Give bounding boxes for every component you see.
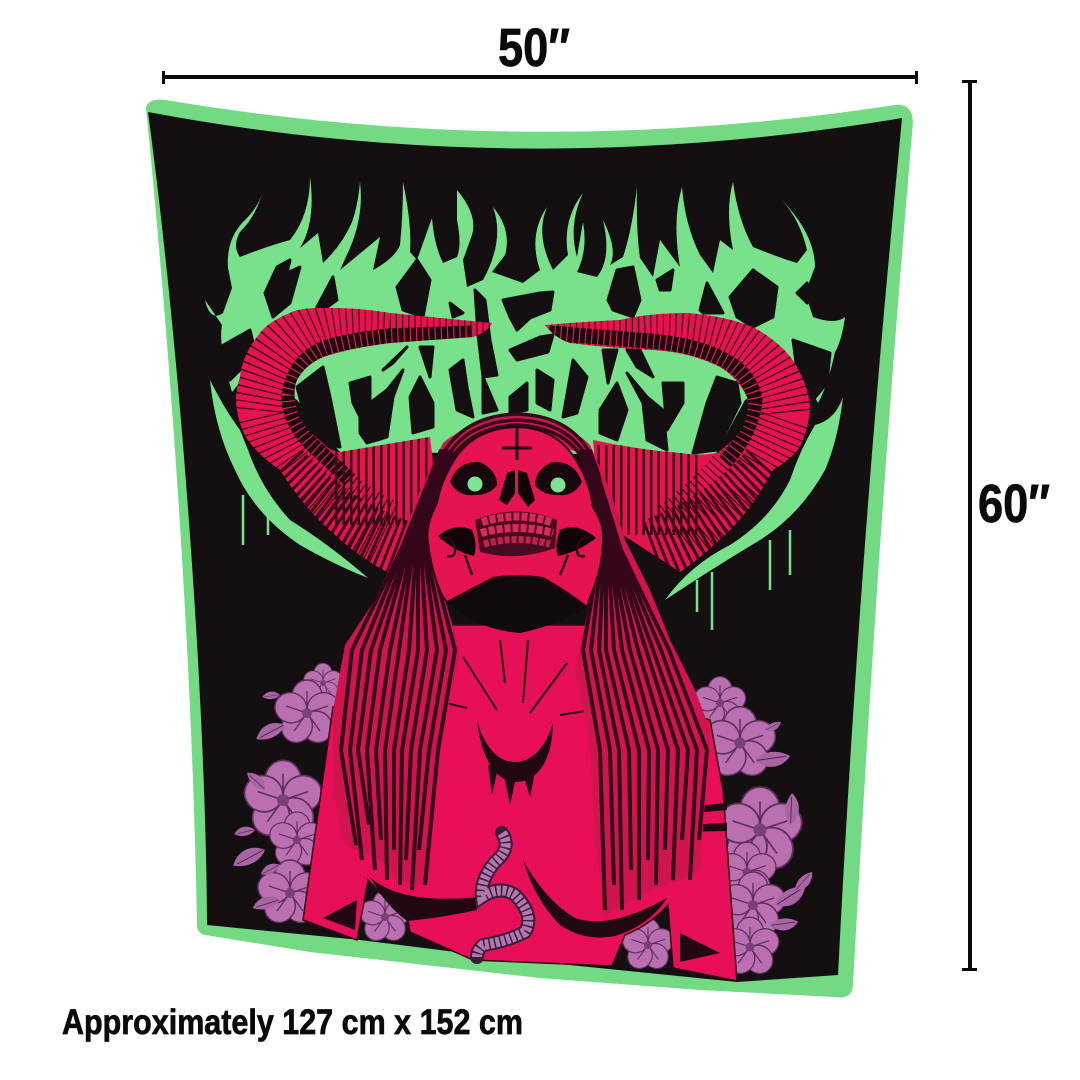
artwork: right breast curve bbox=[523, 860, 667, 938]
caption: metric size: Approximately 127 cm x 152 cm bbox=[62, 1003, 523, 1042]
artwork: flowers bbox=[231, 663, 817, 979]
artwork: hair arcs over skull bbox=[432, 414, 600, 480]
dimension: width arrow bbox=[162, 71, 918, 84]
blanket bbox=[146, 100, 913, 997]
artwork: black mouth bbox=[443, 576, 592, 633]
dimension: height arrow bbox=[962, 80, 977, 971]
blanket black field bbox=[148, 112, 902, 982]
skull: teeth bbox=[475, 512, 557, 556]
artwork: crescent moon necklace bbox=[477, 720, 553, 805]
skull: cheek hollows bbox=[438, 527, 596, 556]
skull: eyes bbox=[450, 462, 582, 495]
artwork: skull bbox=[427, 427, 603, 607]
skull: nose bbox=[499, 470, 535, 507]
artwork: side triangles bbox=[323, 900, 720, 962]
skull: inverted cross bbox=[502, 427, 532, 460]
artwork: right horn bbox=[545, 313, 810, 572]
artwork: green metal logo flames bbox=[205, 177, 845, 455]
artwork: logo black letter cut-outs bbox=[220, 260, 830, 453]
artwork: arm bands bbox=[683, 803, 727, 832]
artwork: snake bbox=[477, 833, 528, 957]
artwork: green lower wings bbox=[210, 380, 843, 600]
artwork: long hair, right side bbox=[517, 415, 710, 915]
artwork: left horn bbox=[236, 308, 492, 572]
skull: cheek spirals bbox=[440, 537, 592, 575]
blanket green border bbox=[146, 100, 913, 997]
artwork: chest and neck lines bbox=[442, 640, 592, 715]
artwork: body bbox=[303, 625, 737, 981]
artwork: green drips bbox=[243, 495, 790, 630]
dimension label: width: 50″ bbox=[498, 18, 570, 78]
artwork: left breast curve bbox=[370, 877, 480, 921]
dimension label: height: 60″ bbox=[978, 474, 1050, 534]
artwork: long hair, left side bbox=[333, 415, 517, 890]
